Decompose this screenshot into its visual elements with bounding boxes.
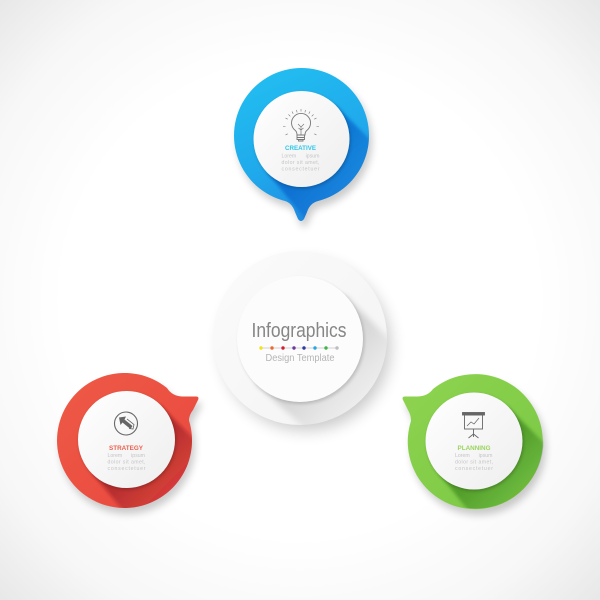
panel: planning (green) xyxy=(402,374,550,518)
body text: planning xyxy=(455,453,493,472)
body text: planning: dolor sit amet, xyxy=(455,460,493,466)
body text: strategy: dolor sit amet, xyxy=(108,460,146,466)
body text: creative xyxy=(282,154,320,172)
icon: presentation board xyxy=(462,412,484,438)
panel: centre hub xyxy=(216,263,398,438)
body text: planning: consectetuer xyxy=(455,466,493,472)
body text: creative: dolor sit amet, xyxy=(282,160,320,166)
subheading: Design Template: Design Template xyxy=(266,352,335,364)
heading: Infographics: Infographics xyxy=(252,320,346,342)
body text: strategy: consectetuer xyxy=(108,466,146,472)
label: STRATEGY: STRATEGY xyxy=(109,445,144,452)
icon: strategy pencil badge xyxy=(114,412,138,435)
body text: strategy: ipsum xyxy=(131,453,145,459)
label: PLANNING: PLANNING xyxy=(458,445,490,452)
body text: creative: Lorem xyxy=(282,154,296,160)
panel: strategy (red) xyxy=(56,373,204,518)
body text: strategy xyxy=(108,453,146,472)
body text: creative: ipsum xyxy=(306,154,320,160)
coloured dot timeline xyxy=(259,346,339,350)
body text: planning: Lorem xyxy=(455,453,470,459)
icon: light bulb xyxy=(283,109,319,141)
body text: planning: ipsum xyxy=(479,453,492,459)
body text: creative: consectetuer xyxy=(282,166,320,172)
panel: creative (blue) xyxy=(234,68,376,228)
body text: strategy: Lorem xyxy=(108,453,122,459)
label: CREATIVE: CREATIVE xyxy=(285,145,317,152)
